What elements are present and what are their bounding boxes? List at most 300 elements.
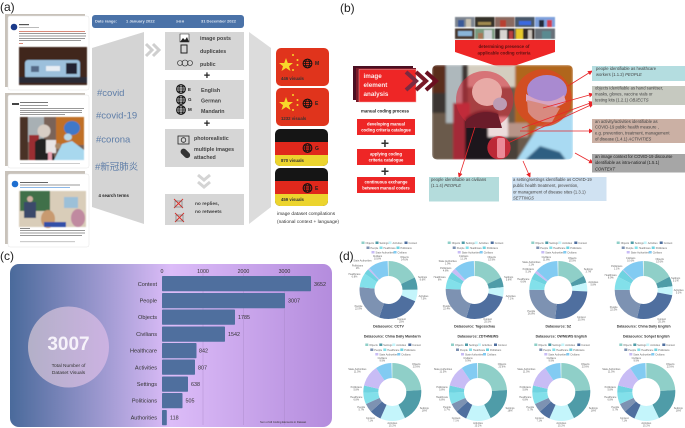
donut: China Daily Mandarin: 15.2%	[389, 424, 397, 428]
donut: Tagesschau: Settings	[466, 242, 475, 245]
value labels: 1785	[238, 315, 250, 321]
donut: CCTV: Context	[397, 318, 406, 321]
donut: CCTV: 25%	[399, 320, 405, 324]
flag: China Mandarin	[276, 48, 329, 86]
donut: SZ: Civilians	[567, 252, 577, 254]
donut: Sohpet English: 23.6%	[667, 366, 675, 368]
donut: OWNEWS English: 11.5%	[523, 370, 531, 374]
panel label (a): (a)	[0, 0, 15, 14]
flag: Germany German: 870 visuals	[281, 158, 305, 163]
donut: ZDTHNEWS: Context	[498, 344, 507, 347]
chevrons into photo	[406, 72, 436, 90]
donut: ZDTHNEWS: 18%	[507, 410, 513, 412]
donut: SZ: 5.8%	[590, 284, 597, 286]
image strip	[455, 17, 555, 39]
donut: SZ: Datasource: SZ	[545, 324, 572, 328]
filter box: image type	[165, 129, 244, 167]
donut: China Daily English: Politicians	[656, 247, 668, 250]
donut: CCTV: Settings	[418, 276, 428, 279]
donut: China Daily Mandarin: State Authorities	[348, 368, 367, 371]
donut: CCTV: Activities	[392, 242, 403, 245]
donut: Sohpet English: 7.1%	[621, 420, 628, 422]
axis ticks: 2000	[238, 269, 249, 275]
donut: ZDTHNEWS: 7.1%	[453, 420, 460, 422]
plus: +	[381, 135, 389, 151]
panel label (b): (b)	[340, 1, 355, 15]
filter box: image type: photorealistic	[194, 136, 229, 142]
donut: SZ: 5.1%	[525, 270, 532, 274]
callout: settings: or management of disease sites (1.3.1)	[513, 190, 586, 194]
donut: CCTV: Context	[408, 242, 417, 245]
donut: Sohpet English: 5.7%	[612, 408, 619, 412]
donut: China Daily Mandarin: People	[374, 349, 383, 352]
donut: ZDTHNEWS: Civilians	[487, 354, 497, 356]
donut: OWNEWS English: Civilians	[547, 357, 557, 360]
flag: Germany English: 459 visuals	[281, 197, 305, 202]
donut: China Daily Mandarin: Activities	[387, 422, 398, 425]
donut: Sohpet English: Healthcare	[604, 396, 617, 399]
donut: Sohpet English: 18%	[676, 410, 682, 412]
filter box: image type: multiple images	[194, 147, 234, 153]
donut: Sohpet English: State Authorities	[602, 368, 621, 371]
panel: tweet examples	[5, 14, 89, 247]
donut: Sohpet English: Politicians	[658, 349, 670, 352]
dataset caption: (national context + language)	[277, 219, 339, 225]
donut: China Daily English: 25.3%	[658, 320, 666, 324]
donut: CCTV: 22.9%	[355, 308, 363, 310]
step: applying catalogue: applying coding	[370, 152, 402, 156]
image element analysis block: element	[364, 82, 388, 89]
donut: Sohpet English: Context	[666, 344, 675, 347]
red banner: coding criteria	[455, 40, 555, 69]
donut: China Daily English: Healthcare	[605, 274, 617, 277]
axis ticks: 1000	[197, 269, 209, 275]
donut: Tagesschau: Activities	[506, 295, 516, 298]
donut: SZ: Healthcare	[517, 278, 530, 281]
donut: SZ: 25.9%	[578, 318, 586, 322]
donut: ZDTHNEWS: Context	[452, 417, 461, 420]
donut: ZDTHNEWS: People	[460, 349, 468, 352]
donut: Sohpet English: Datasource: Sohpet English	[623, 334, 670, 338]
donut: Sohpet English: 6.8%	[607, 398, 614, 402]
donut: China Daily Mandarin: Civilians	[378, 357, 388, 360]
donut: OWNEWS English: 5.8%	[522, 388, 529, 392]
donut: SZ: Objects	[568, 257, 577, 260]
donut: ZDTHNEWS: Healthcare	[436, 396, 449, 399]
donut: ZDTHNEWS: 15.2%	[474, 424, 482, 428]
category labels: Settings	[137, 382, 157, 388]
value labels	[170, 282, 326, 421]
donut: CCTV: 14.6%	[401, 258, 409, 262]
donut: SZ: 6.6%	[520, 280, 527, 284]
callout: activities: an activity/activities identifiable as	[595, 119, 658, 124]
donut: Sohpet English: Objects	[666, 363, 675, 366]
donut: China Daily Mandarin	[348, 334, 430, 428]
donut: CCTV: State Authorities	[353, 260, 372, 262]
donut: SZ: Settings	[584, 268, 594, 271]
step: continuous exchange	[357, 177, 415, 193]
donut: OWNEWS English: 15.2%	[558, 424, 566, 428]
donut: China Daily Mandarin: 9.9%	[379, 360, 386, 362]
donut: Sohpet English: 5.8%	[607, 388, 614, 392]
plus 1: +	[204, 70, 210, 82]
donut: China Daily English: Context	[657, 318, 666, 321]
donut: CCTV: Objects	[400, 256, 409, 259]
callout: context: an image context for COVID-19 discourse	[595, 154, 673, 159]
donut: China Daily Mandarin: Healthcare	[350, 396, 363, 399]
donut: SZ: People	[527, 310, 536, 313]
donut: Tagesschau: Objects	[487, 256, 497, 259]
donut: SZ: Activities	[562, 242, 573, 245]
tweet card 1	[5, 14, 89, 90]
image element analysis block	[353, 66, 416, 102]
donut: Tagesschau: 25.5%	[484, 320, 492, 324]
donut: China Daily English: State Authorities	[631, 252, 650, 254]
filter box: language: English	[201, 88, 220, 94]
donut: ZDTHNEWS: People	[443, 406, 451, 409]
donut: SZ: 3.7%	[585, 270, 592, 274]
donut: CCTV: Politicians	[400, 247, 413, 250]
callout: settings: a setting/settings identifiable as COVID-19	[513, 177, 592, 182]
donut: OWNEWS English: People	[526, 406, 535, 409]
highlight: sanitiser	[487, 136, 511, 159]
donut: China Daily English	[605, 242, 684, 328]
donut: ZDTHNEWS: Datasource: ZDTHNEWS	[457, 334, 499, 338]
donut: Sohpet English: Civilians	[655, 354, 665, 356]
donut: Tagesschau: State Authorities	[439, 260, 458, 263]
donut: Sohpet English: Activities	[650, 344, 661, 347]
donut: CCTV: Objects	[366, 242, 375, 245]
plus: +	[381, 163, 389, 179]
panel label (d): (d)	[339, 249, 354, 263]
donut: SZ: People	[540, 247, 549, 250]
donut: Tagesschau: 22.4%	[443, 308, 451, 310]
donut: China Daily English: Context	[664, 242, 673, 245]
donut: China Daily English: Settings	[671, 277, 681, 280]
donut: China Daily Mandarin: Politicians	[404, 349, 416, 352]
filter box: language: G	[188, 97, 192, 102]
donut: China Daily English: Civilians	[653, 252, 663, 254]
donut: OWNEWS English: Healthcare	[556, 349, 569, 352]
value labels: 505	[186, 399, 194, 405]
highlight: healthcare worker	[514, 69, 572, 127]
donut: ZDTHNEWS: Politicians	[490, 349, 502, 352]
flag: Germany English: E	[315, 186, 319, 192]
chevrons down	[198, 175, 210, 187]
value labels: 1542	[228, 332, 240, 338]
donut: China Daily Mandarin: 18%	[422, 410, 428, 412]
donut: CCTV: People	[355, 305, 363, 308]
callout: objects: masks, gloves, vaccine vials or	[595, 92, 653, 96]
donut: Sohpet English: Settings	[637, 344, 647, 347]
donut: ZDTHNEWS: 23.6%	[498, 366, 506, 368]
donut: China Daily English: Healthcare	[639, 247, 651, 250]
filter box: post type	[165, 32, 244, 70]
donut: CCTV: 10.8%	[374, 258, 382, 260]
dataset caption	[277, 211, 339, 225]
date range bar: »»»	[176, 19, 185, 25]
donut: OWNEWS English: Context	[535, 417, 544, 420]
donut: China Daily English: 15.6%	[656, 260, 664, 264]
donut: Tagesschau: 4.8%	[443, 270, 449, 272]
value labels: 3007	[288, 298, 300, 304]
filter box: language: German	[201, 98, 221, 104]
donut: ZDTHNEWS: Civilians	[463, 357, 473, 360]
callout: objects: testing kits (1.2.1) OBJECTS	[595, 98, 649, 102]
right funnel	[249, 32, 271, 224]
donut: OWNEWS English: 23.6%	[582, 366, 590, 368]
value labels: 842	[199, 349, 208, 355]
donut: OWNEWS English: People	[543, 349, 552, 352]
donut: OWNEWS English: Objects	[538, 344, 548, 347]
step: developing catalogue	[357, 119, 415, 135]
donut: Sohpet English: Objects	[623, 344, 633, 347]
filter box: language	[165, 80, 244, 119]
donut: Tagesschau: 6%	[438, 278, 442, 282]
donut: CCTV	[348, 242, 429, 328]
callout: objects: objects identifiable as hand sanitiser,	[595, 86, 663, 90]
tweet card 2	[5, 93, 89, 168]
donut: SZ: Settings	[549, 242, 559, 245]
donut: Sohpet English: People	[611, 406, 620, 409]
filter box: post type: duplicates	[200, 49, 226, 55]
donut: China Daily English: 5.3%	[676, 292, 682, 294]
donut: SZ: Context	[577, 316, 586, 319]
filter box: exclusions	[165, 194, 244, 225]
donut: OWNEWS English: 6.8%	[522, 398, 529, 402]
donut: Tagesschau	[434, 242, 516, 328]
donut: Sohpet English: Context	[620, 417, 629, 420]
donut: China Daily Mandarin: 7.1%	[367, 420, 374, 422]
total circle: Dataset Visuals	[52, 370, 86, 376]
tweet card 3	[5, 171, 89, 247]
donut: ZDTHNEWS: Healthcare	[473, 349, 486, 352]
callout: context: CONTEXT	[595, 166, 615, 172]
filter box: language: Mandarin	[201, 109, 225, 115]
date range bar: 1 January 2022	[126, 18, 155, 24]
flag: China English	[276, 88, 329, 126]
donut: Sohpet English: Settings	[674, 407, 684, 410]
donut: China Daily English: 22.5%	[610, 308, 618, 312]
donut: China Daily Mandarin: Politicians	[351, 386, 363, 389]
donut: SZ: 11.8%	[543, 258, 551, 262]
filter box: image type: attached	[194, 155, 216, 161]
donut: China Daily English: Datasource: China Daily English	[617, 324, 671, 328]
total circle: 3007	[47, 334, 90, 355]
donut: China Daily English: 8.9%	[608, 276, 614, 280]
donut: Sohpet English: Civilians	[632, 357, 642, 360]
flag: Germany German: G	[315, 146, 319, 152]
donut: Tagesschau: Settings	[504, 276, 514, 279]
donut: China Daily English: Politicians	[611, 265, 623, 268]
donut: SZ: Healthcare	[553, 247, 566, 250]
step: developing catalogue: coding criteria catalogue	[361, 128, 411, 132]
image element analysis block: analysis	[364, 91, 389, 98]
donut: Tagesschau: Healthcare	[470, 247, 482, 250]
donut: OWNEWS English: State Authorities	[548, 354, 567, 356]
donut: OWNEWS English	[517, 334, 599, 428]
total circle: Total Number of	[52, 363, 86, 369]
filter box: post type: image posts	[200, 36, 231, 42]
filter box: exclusions: no replies,	[195, 201, 220, 207]
donut: SZ: State Authorities	[522, 261, 541, 264]
value labels: 638	[191, 382, 200, 388]
step: applying catalogue	[357, 149, 415, 165]
donut: CCTV: Civilians	[398, 252, 408, 254]
category labels: People	[140, 298, 157, 304]
donut: ZDTHNEWS: Objects	[455, 344, 464, 347]
callout: healthcare workers	[592, 66, 685, 81]
donut: Tagesschau: Politicians	[487, 247, 499, 250]
donut: China Daily Mandarin: Civilians	[401, 354, 411, 356]
donut: Tagesschau: People	[443, 305, 451, 308]
value labels: 807	[198, 365, 207, 371]
donut: OWNEWS English: 5.7%	[527, 408, 534, 412]
category labels: Healthcare	[130, 349, 157, 355]
dataset caption: image dataset compilations	[277, 211, 336, 217]
date range bar	[92, 15, 244, 28]
donut: China Daily Mandarin: 11.5%	[354, 370, 362, 374]
donut: Tagesschau: State Authorities	[462, 252, 481, 254]
callout: context	[592, 154, 685, 172]
donut: OWNEWS English: Objects	[581, 363, 590, 366]
donut: ZDTHNEWS: 6.8%	[439, 398, 446, 402]
donut: Tagesschau: Civilians	[484, 252, 494, 254]
donut: OWNEWS English: Activities	[556, 422, 567, 425]
search terms funnel: 4 search terms	[98, 193, 129, 198]
step: continuous exchange: continuous exchange	[364, 180, 408, 184]
donut: Sohpet English: Activities	[641, 422, 652, 425]
donut: Tagesschau: Context	[483, 318, 492, 321]
donut: CCTV: Healthcare	[384, 247, 396, 250]
step: applying catalogue: criteria catalogue	[369, 158, 404, 162]
donut: SZ: 26.8%	[528, 312, 536, 316]
filter box: language: E	[188, 87, 191, 92]
callout: healthcare workers: people identifiable as healthcare	[596, 66, 657, 71]
highlight: civilian	[456, 71, 513, 128]
callout: settings	[512, 177, 606, 201]
donut: ZDTHNEWS: Politicians	[436, 386, 448, 389]
donut: Tagesschau: 15.9%	[488, 258, 496, 262]
donut: China Daily English: Objects	[655, 258, 665, 261]
donut: SZ: Politicians	[570, 247, 582, 250]
donut: China Daily English: 1.1%	[614, 268, 620, 270]
donut: SZ: Activities	[588, 281, 599, 284]
manual coding heading: manual coding process	[361, 108, 410, 114]
donut: Tagesschau: 11.1%	[460, 258, 468, 260]
category labels	[130, 282, 157, 421]
donut: OWNEWS English: Datasource: OWNEWS English	[536, 334, 587, 338]
donut: OWNEWS English: 7.1%	[536, 420, 543, 422]
donut: Tagesschau: People	[457, 247, 465, 250]
value labels: 118	[170, 415, 179, 421]
callout: objects	[592, 86, 685, 105]
donut: CCTV: People	[370, 247, 379, 250]
donut: China Daily English: 5.1%	[673, 280, 679, 282]
category labels: Objects	[138, 315, 157, 321]
category labels: Activities	[135, 365, 157, 371]
step: developing catalogue: developing manual	[367, 122, 405, 126]
donut: OWNEWS English: Context	[581, 344, 590, 347]
panel: total visuals bar chart	[10, 264, 332, 427]
donut: CCTV: Activities	[419, 295, 429, 298]
donut: CCTV: 7.5%	[421, 298, 427, 300]
donut: Sohpet English	[602, 334, 684, 428]
donut: Tagesschau: Civilians	[459, 255, 469, 258]
donut: China Daily Mandarin: Healthcare	[387, 349, 400, 352]
donut: Tagesschau: Healthcare	[434, 276, 446, 279]
chevrons right	[146, 44, 159, 56]
donut: ZDTHNEWS: State Authorities	[465, 354, 484, 356]
callout: activities: of disease (1.4.1) ACTIVITIES	[595, 136, 652, 142]
callout: settings: public health treatment, prevention,	[513, 183, 578, 188]
flag: China English: 1232 visuals	[281, 116, 307, 121]
donut: China Daily Mandarin: 23.6%	[413, 366, 421, 368]
donut: China Daily Mandarin: Activities	[396, 344, 407, 347]
donut: SZ: Context	[578, 242, 587, 245]
donut: Tagesschau: Activities	[479, 242, 489, 245]
donut: CCTV: State Authorities	[376, 252, 394, 254]
search terms funnel	[92, 32, 144, 224]
donut: China Daily Mandarin: Settings	[420, 407, 430, 410]
donut: OWNEWS English: 18%	[591, 410, 597, 412]
donut: CCTV: 9.6%	[420, 278, 426, 282]
donut: Tagesschau: Objects	[452, 242, 461, 245]
donut: ZDTHNEWS: 5.7%	[444, 408, 451, 412]
annotated photo	[432, 65, 573, 160]
category labels: Civilians	[136, 332, 157, 338]
flag: Germany English	[275, 168, 328, 206]
total circle	[28, 306, 109, 388]
red banner: coding criteria: applicable coding criteria	[478, 50, 531, 56]
donut: China Daily Mandarin: Objects	[412, 363, 421, 366]
donut: OWNEWS English: Healthcare	[519, 396, 532, 399]
value labels: 3652	[314, 282, 326, 288]
donut: CCTV: Healthcare	[348, 273, 361, 276]
donut: CCTV: Civilians	[373, 255, 383, 258]
callout: activities: COVID-19 public health measure ,	[595, 124, 659, 130]
search terms funnel: #新冠肺炎	[95, 161, 139, 173]
donut: ZDTHNEWS: 9.9%	[465, 360, 472, 362]
donut: ZDTHNEWS: Activities	[482, 344, 493, 347]
donut: China Daily Mandarin: Context	[366, 417, 375, 420]
donut: Sohpet English: Healthcare	[641, 349, 654, 352]
donut: China Daily Mandarin: 5.8%	[353, 388, 360, 392]
donut: OWNEWS English: Civilians	[570, 354, 580, 356]
step: continuous exchange: between manual coders	[362, 186, 410, 190]
donut: OWNEWS English: State Authorities	[517, 368, 536, 371]
callout: civilians: (1.1.4) PEOPLE	[431, 183, 461, 188]
donut: Sohpet English: 9.9%	[633, 360, 640, 362]
axis ticks: 0	[161, 269, 164, 275]
callout: settings: SETTINGS	[513, 196, 534, 200]
donut: Tagesschau: 7.1%	[508, 298, 514, 300]
donut: SZ: 15.5%	[569, 260, 577, 262]
donut: China Daily Mandarin: People	[357, 406, 366, 409]
donut: China Daily Mandarin: State Authorities	[379, 354, 398, 356]
donut: Tagesschau: Datasource: Tagesschau	[454, 324, 495, 328]
donut: SZ: Politicians	[523, 268, 535, 271]
image element analysis block: image	[364, 73, 382, 80]
flag: China Mandarin: M	[315, 61, 319, 67]
category labels: Authorities	[131, 415, 157, 421]
grid lines	[203, 273, 284, 425]
filter box: language: M	[188, 107, 192, 112]
donut: Tagesschau: Context	[495, 242, 504, 245]
callout: healthcare workers: workers (1.1.2) PEOPLE	[596, 72, 642, 77]
axis ticks	[161, 269, 290, 275]
donut: China Daily Mandarin: Objects	[369, 344, 379, 347]
